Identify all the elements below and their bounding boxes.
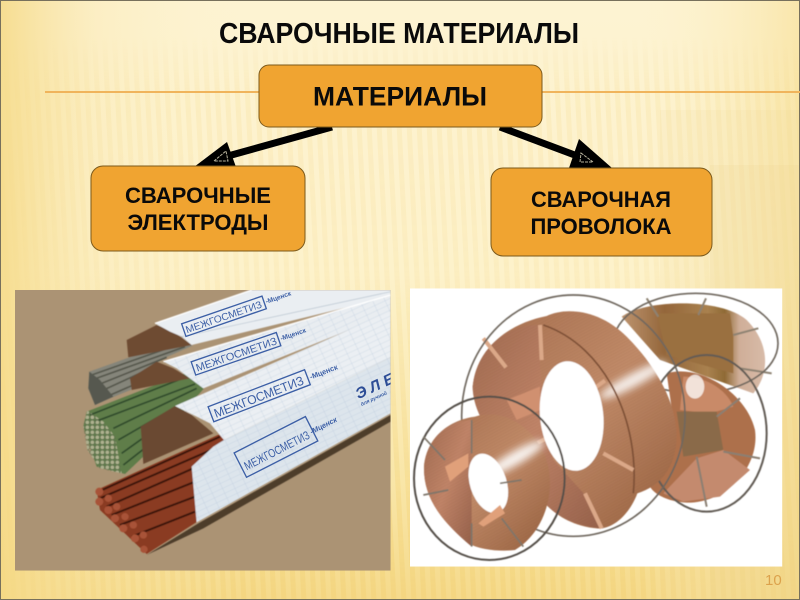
- pack labels: ЭЛЕК: [353, 362, 414, 403]
- arrow: to wire: [500, 127, 612, 168]
- photo: spools of copper welding wire: [410, 288, 782, 567]
- cardboard back: [127, 325, 192, 357]
- box: welding electrodes: СВАРОЧНЫЕ: [125, 183, 271, 208]
- pack labels: для ручной: [360, 390, 388, 408]
- pack labels: МЕЖГОСМЕТИЗ: [242, 428, 312, 473]
- box: welding wire: [491, 168, 712, 256]
- pack shadow: [147, 415, 391, 555]
- red rods: [97, 434, 224, 554]
- pack labels: -Мценск: [265, 290, 293, 306]
- pack labels: МЕЖГОСМЕТИЗ: [212, 374, 306, 421]
- front pack top face: [175, 312, 391, 440]
- pack labels: МЕЖГОСМЕТИЗ: [194, 335, 279, 375]
- box: materials: МАТЕРИАЛЫ: [313, 82, 487, 112]
- box: welding wire: СВАРОЧНАЯ: [531, 187, 671, 212]
- front pack side face: [192, 357, 391, 522]
- box: welding electrodes: ЭЛЕКТРОДЫ: [128, 210, 268, 235]
- gray rods: [88, 339, 193, 405]
- title: СВАРОЧНЫЕ МАТЕРИАЛЫ: [219, 18, 579, 50]
- horizontal accent line: [45, 91, 800, 93]
- large spool: [473, 311, 677, 528]
- middle pack: [163, 295, 391, 388]
- arrow: to electrodes: [194, 127, 332, 167]
- small spool: [424, 414, 550, 551]
- pack labels: -Мценск: [308, 362, 339, 381]
- pack labels: -Мценск: [280, 327, 308, 343]
- box: materials: [259, 65, 542, 127]
- box: welding electrodes: [91, 166, 305, 251]
- pack labels: -Мценск: [308, 414, 340, 436]
- right spool: [650, 371, 755, 503]
- pack labels: [180, 292, 391, 478]
- cardboard front: [141, 406, 213, 464]
- photo: packs of welding electrodes: [15, 287, 414, 571]
- back pack: [155, 290, 391, 345]
- green rods: [83, 373, 204, 474]
- box: welding wire: ПРОВОЛОКА: [530, 214, 672, 239]
- slide number: 10: [765, 572, 782, 589]
- back spool: [622, 303, 765, 393]
- pack labels: МЕЖГОСМЕТИЗ: [184, 300, 264, 336]
